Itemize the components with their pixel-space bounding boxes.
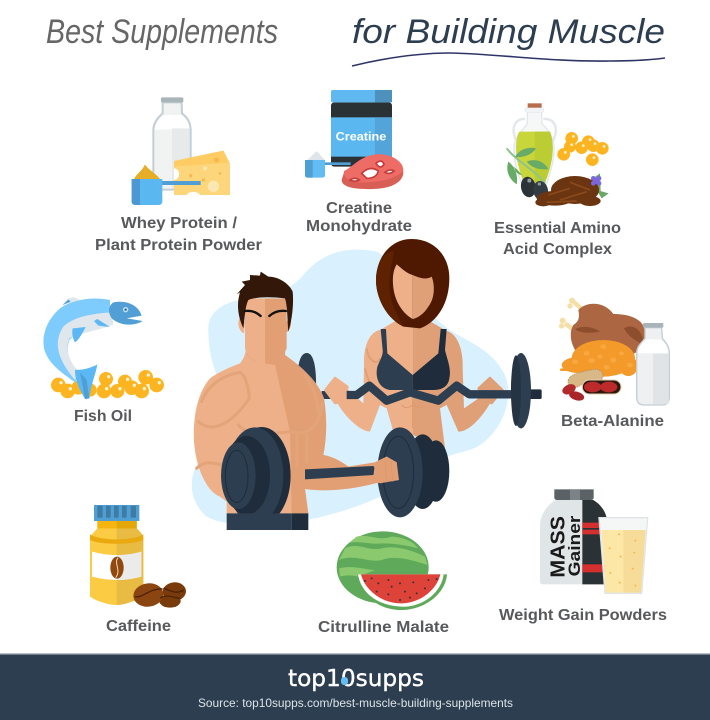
head	[109, 302, 143, 325]
tub label: MASS	[546, 516, 569, 578]
icon: beta-alanine	[559, 298, 669, 405]
man	[194, 272, 399, 530]
label: citrulline malate: Citrulline Malate	[318, 619, 449, 636]
whole melon	[337, 531, 429, 603]
chicken	[571, 304, 645, 357]
icon: whey protein	[132, 97, 230, 205]
jar label: Creatine	[336, 129, 386, 143]
tub	[540, 500, 582, 584]
flower	[591, 176, 601, 186]
source: Source: top10supps.com/best-muscle-building-supplements	[198, 696, 513, 710]
title: Best Supplements	[46, 13, 278, 51]
fist	[373, 457, 399, 483]
melon slice rind	[357, 574, 447, 610]
central illustration: bodybuilders	[192, 239, 542, 530]
capsules	[557, 132, 609, 166]
icon: mass gainer: Gainer	[565, 515, 584, 576]
arm shading	[365, 348, 462, 398]
label: creatine monohydrate: Monohydrate	[306, 218, 412, 235]
cheese	[174, 151, 230, 195]
face	[393, 264, 413, 319]
lentils	[560, 340, 638, 377]
logo capsule	[341, 677, 348, 685]
label: weight gain powders: Weight Gain Powders	[499, 607, 667, 624]
oil bottle	[514, 119, 556, 142]
icon: caffeine	[90, 505, 187, 609]
title: for Building Muscle	[352, 13, 665, 51]
label: whey protein	[95, 215, 262, 254]
head	[245, 298, 265, 363]
right plate	[511, 353, 531, 428]
rear plate of woman's barbell	[298, 353, 316, 392]
bottle cap	[94, 505, 139, 521]
meat	[342, 154, 403, 189]
capsules behind	[51, 378, 97, 397]
ears	[238, 318, 245, 333]
man's hair	[237, 272, 293, 332]
dorsal fin	[62, 297, 80, 306]
icon: mass gainer	[540, 489, 648, 593]
shake glass	[599, 518, 648, 593]
muscle shading	[197, 353, 322, 468]
label: essential amino acid complex: Acid Complex	[503, 241, 612, 258]
woman	[298, 239, 542, 448]
trunks	[227, 513, 292, 530]
capsules front	[60, 370, 164, 398]
curved bar	[347, 386, 518, 401]
herb pile	[535, 176, 601, 206]
woman's body	[337, 318, 413, 435]
eyebrows	[245, 311, 286, 316]
icon: fish oil	[43, 297, 164, 399]
label: whey protein: Whey Protein /	[121, 215, 238, 232]
forearm over bar	[290, 465, 305, 488]
right heavy dumbbell plates	[377, 427, 449, 517]
scoop	[307, 151, 325, 160]
olives	[519, 176, 537, 198]
flower leaves	[588, 173, 609, 198]
fish body	[43, 299, 110, 382]
tail	[75, 364, 97, 399]
bra	[377, 329, 413, 390]
coffee beans	[162, 581, 187, 602]
icon: creatine	[305, 90, 403, 189]
left dumbbell plates	[233, 427, 291, 524]
fins	[72, 327, 86, 342]
man's torso	[194, 335, 398, 513]
footer	[0, 653, 710, 720]
abs	[402, 398, 425, 428]
jar	[331, 102, 392, 167]
background blob	[192, 250, 508, 525]
dumbbell bar	[305, 466, 376, 479]
label: caffeine: Caffeine	[106, 618, 171, 635]
milk bottle	[153, 102, 191, 190]
label: fish oil: Fish Oil	[74, 408, 132, 425]
peanuts	[568, 369, 603, 387]
icon: essential amino	[507, 103, 609, 206]
bottle body	[90, 521, 143, 605]
label: creatine monohydrate: Creatine	[326, 200, 392, 217]
label: essential amino acid complex: Essential Amino	[494, 220, 621, 237]
bottle label	[92, 552, 141, 580]
label: creatine monohydrate	[306, 200, 412, 235]
hair back	[376, 239, 449, 328]
icon: watermelon	[337, 531, 447, 610]
title	[46, 13, 665, 66]
olive branch	[507, 148, 545, 183]
chicken bones	[565, 302, 585, 333]
label: essential amino acid complex	[494, 220, 621, 258]
scoop	[134, 164, 160, 179]
melon slice flesh	[361, 574, 440, 603]
label: whey protein: Plant Protein Powder	[95, 237, 262, 254]
label: beta-alanine: Beta-Alanine	[561, 413, 664, 430]
milk bottle	[637, 328, 669, 405]
logo: top10supps	[288, 666, 424, 692]
